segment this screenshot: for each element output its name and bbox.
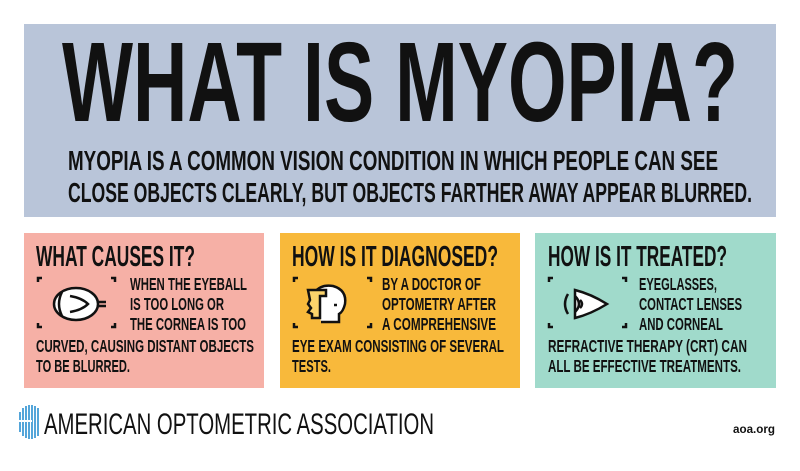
text: diagnosed body: TESTS. <box>292 356 331 376</box>
panel: treated <box>535 233 776 388</box>
text: diagnosed body <box>292 274 504 376</box>
heading: what causes it: WHAT CAUSES IT? <box>36 241 195 273</box>
icon: head <box>294 278 371 327</box>
text: causes body: CURVED, CAUSING DISTANT OBJECTS <box>36 336 254 356</box>
text: diagnosed body: BY A DOCTOR OF <box>382 274 481 294</box>
subtitle <box>68 145 752 208</box>
text: treated body: CONTACT LENSES <box>639 294 742 314</box>
icon: aoa mark <box>18 405 38 439</box>
panel: causes <box>24 233 264 388</box>
heading: how is it diagnosed: HOW IS IT DIAGNOSED? <box>292 241 498 273</box>
text: causes body: WHEN THE EYEBALL <box>130 274 247 294</box>
icon: eyeball <box>38 278 115 327</box>
text: diagnosed body: EYE EXAM CONSISTING OF SEVERAL <box>292 336 504 356</box>
text: association name: AMERICAN OPTOMETRIC ASSOCIATION <box>44 408 434 441</box>
text: causes body: TO BE BLURRED. <box>36 356 130 376</box>
icon: eye with lens <box>549 278 626 327</box>
text: causes body <box>36 274 254 376</box>
text: treated body: EYEGLASSES, <box>639 274 717 294</box>
logo: AOA <box>18 405 434 441</box>
text: diagnosed body: A COMPREHENSIVE <box>382 314 496 334</box>
text: treated body: AND CORNEAL <box>639 314 723 334</box>
text: treated body <box>548 274 747 376</box>
text: causes body: THE CORNEA IS TOO <box>130 314 246 334</box>
panel: diagnosed <box>280 233 520 388</box>
text: url: aoa.org <box>733 422 775 436</box>
text: diagnosed body: OPTOMETRY AFTER <box>382 294 496 314</box>
text: causes body: IS TOO LONG OR <box>130 294 224 314</box>
panel: header <box>24 19 776 217</box>
